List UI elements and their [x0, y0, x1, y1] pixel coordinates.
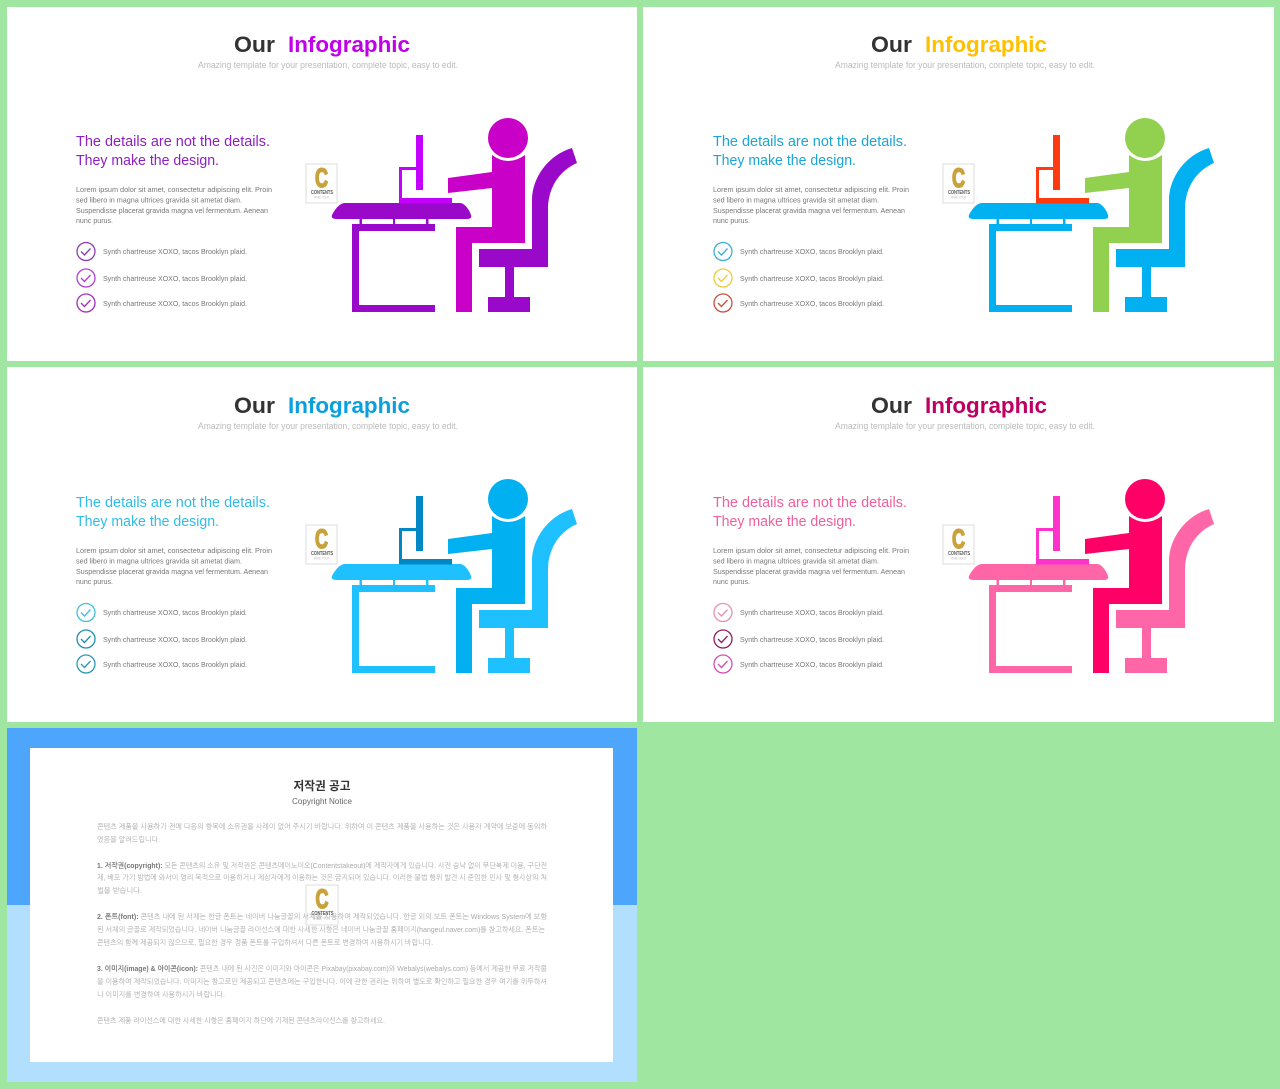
logo: C: [315, 524, 328, 554]
checklist: Synth chartreuse XOXO, tacos Brooklyn plaid.: [740, 299, 884, 308]
panel: purple infographic: [7, 7, 637, 361]
logo: [306, 524, 337, 564]
section 1: copyright: 벌을 받습니다.: [97, 886, 142, 895]
logo: C: [316, 884, 328, 914]
checklist: Synth chartreuse XOXO, tacos Brooklyn plaid.: [103, 635, 247, 644]
person: [1085, 479, 1165, 673]
paragraph: Lorem ipsum dolor sit amet, consectetur adipiscing elit. Proin: [76, 546, 272, 555]
logo: MAKE YOUR: [951, 196, 967, 200]
title: Our: [871, 32, 912, 57]
title: Our: [871, 393, 912, 418]
subtitle: Amazing template for your presentation, complete topic, easy to edit.: [835, 60, 1095, 70]
icon: check 1: [77, 242, 95, 260]
panel: pink infographic: [643, 367, 1274, 722]
checklist: [714, 242, 884, 312]
paragraph: sed libero in magna ultrices gravida sit ametat diam.: [713, 196, 879, 204]
logo: CONTENTS: [948, 551, 971, 557]
checklist: Synth chartreuse XOXO, tacos Brooklyn plaid.: [103, 608, 247, 617]
subtitle: Amazing template for your presentation, complete topic, easy to edit.: [835, 421, 1095, 431]
logo: MAKE YOUR: [951, 556, 967, 560]
paragraph: Lorem ipsum dolor sit amet, consectetur adipiscing elit. Proin: [713, 546, 909, 555]
desk and chair: [332, 148, 577, 312]
person: [448, 479, 528, 673]
title: [871, 32, 1047, 57]
checklist: Synth chartreuse XOXO, tacos Brooklyn plaid.: [103, 274, 247, 283]
icon: person at desk: [969, 118, 1214, 312]
heading: They make the design.: [76, 514, 219, 530]
icon: check 2: [714, 269, 732, 287]
logo: [306, 163, 337, 203]
paragraph: sed libero in magna ultrices gravida sit ametat diam.: [713, 556, 879, 566]
title: Our: [234, 393, 275, 418]
icon: check 2: [714, 630, 732, 648]
paragraph: [713, 185, 909, 225]
logo: CONTENTS: [948, 190, 971, 196]
title: Infographic: [288, 393, 410, 418]
section 1: copyright: [97, 861, 547, 895]
section 2: font: [97, 912, 547, 947]
subheading: Copyright Notice: [292, 796, 352, 806]
icon: person at desk: [969, 479, 1214, 673]
heading: They make the design.: [713, 514, 856, 530]
checklist: Synth chartreuse XOXO, tacos Brooklyn plaid.: [740, 635, 884, 644]
section 3: images and icons: 을 이용하여 제작되었습니다. 이미지는 참고로만 제공되고 콘텐츠에는 구입한니다. 이에 관한 권리는 위하여 별도로 확인하고 필요한 경우 여기를 위두하셔: [97, 977, 547, 986]
paragraph: nunc purus.: [76, 216, 113, 225]
icon: check 1: [77, 604, 95, 622]
section 3: images and icons: 나 이미지를 변경하여 사용하시기 바랍니다.: [97, 990, 225, 999]
subtitle: Amazing template for your presentation, complete topic, easy to edit.: [198, 60, 458, 70]
checklist: Synth chartreuse XOXO, tacos Brooklyn plaid.: [103, 660, 247, 669]
logo: CONTENTS: [312, 911, 334, 917]
paragraph: nunc purus.: [713, 216, 750, 225]
intro text: 였음을 알려드립니다.: [97, 835, 160, 844]
desk and chair: [969, 148, 1214, 312]
paragraph: Suspendisse placerat gravida magna vel fermentum. Aenean: [713, 567, 905, 576]
paragraph: nunc purus.: [76, 577, 113, 586]
title: Infographic: [925, 32, 1047, 57]
checklist: [77, 242, 247, 312]
section 1: copyright: 1. 저작권(copyright): 모든 콘텐츠의 소유 및 저작권은 콘텐츠메이노이오(Contentstakeout)에 제작자에게 있습니다. 사전 승낙 없이 무단복제 이용, 구단전: [97, 861, 547, 870]
paragraph: [76, 185, 272, 225]
title: Infographic: [925, 393, 1047, 418]
panel: blue infographic: [7, 367, 637, 722]
monitor: [399, 496, 452, 564]
intro text: 콘텐츠 제품을 사용하기 전에 다음의 항목에 소유권을 사례이 없어 주시기 바랍니다. 위하여 이 콘텐츠 제품을 사용하는 것은 사용자 계약에 보증에 동의하: [97, 822, 547, 831]
icon: check 2: [77, 269, 95, 287]
paragraph: Lorem ipsum dolor sit amet, consectetur adipiscing elit. Proin: [713, 185, 909, 194]
icon: person at desk: [332, 118, 577, 312]
paragraph: Suspendisse placerat gravida magna vel fermentum. Aenean: [76, 567, 268, 576]
heading: [76, 134, 270, 169]
closing note: 콘텐츠 제품 라이선스에 대한 사세한 사항은 홈페이지 하단에 기재된 콘텐츠라이선스를 참고하세요.: [97, 1016, 385, 1025]
heading: [76, 495, 270, 530]
icon: person at desk: [332, 479, 577, 673]
logo: C: [952, 524, 965, 554]
checklist: Synth chartreuse XOXO, tacos Brooklyn plaid.: [740, 247, 884, 256]
icon: check 3: [714, 294, 732, 312]
monitor: [399, 135, 452, 204]
checklist: Synth chartreuse XOXO, tacos Brooklyn plaid.: [103, 299, 247, 308]
logo: [943, 524, 974, 564]
icon: check 1: [714, 242, 732, 260]
section 2: font: 2. 폰트(font): 콘텐츠 내에 된 서체는 한글 폰트는 네이버 나눔글꼴의 서체를 사용하여 제작되었습니다. 한글 외의 보트 폰트는 Windows System에 보함: [97, 912, 547, 921]
paragraph: nunc purus.: [713, 577, 750, 586]
heading: The details are not the details.: [76, 134, 270, 150]
checklist: Synth chartreuse XOXO, tacos Brooklyn plaid.: [103, 247, 247, 256]
logo: [943, 163, 974, 203]
logo: C: [952, 163, 965, 193]
logo: MAKE YOUR: [314, 196, 330, 200]
checklist: [77, 604, 247, 673]
section 2: font: 콘텐츠의 함께 제공되지 않으므로, 필요한 경우 정품 폰트를 구입하셔서 다른 폰트로 변경하여 사용하시기 바랍니다.: [97, 938, 433, 947]
person: [448, 118, 528, 312]
icon: check 3: [77, 294, 95, 312]
heading: [713, 495, 907, 530]
paragraph: Lorem ipsum dolor sit amet, consectetur adipiscing elit. Proin: [76, 185, 272, 194]
title: [871, 393, 1047, 418]
paragraph: [713, 546, 909, 586]
section 2: font: 된 서체의 글꼴로 제작되었습니다. 네이버 나눔글꼴 라이선스에 대한 사세한 사항은 네이버 나눔글꼴 홈페이지(hangeul.naver.com)를 참고하세요. 폰트는: [97, 925, 545, 934]
title: Our: [234, 32, 275, 57]
intro text: [97, 822, 547, 844]
heading: The details are not the details.: [76, 495, 270, 511]
monitor: [1036, 496, 1089, 564]
logo: CONTENTS: [311, 190, 334, 196]
logo: MAKE YOUR: [314, 556, 330, 560]
heading: 저작권 공고: [294, 778, 350, 793]
title: [234, 393, 410, 418]
heading: They make the design.: [713, 153, 856, 169]
checklist: [714, 604, 884, 673]
icon: check 3: [714, 655, 732, 673]
heading: The details are not the details.: [713, 134, 907, 150]
desk and chair: [969, 509, 1214, 673]
paragraph: sed libero in magna ultrices gravida sit ametat diam.: [76, 556, 242, 566]
panel: multicolor infographic: [643, 7, 1274, 361]
person: [1085, 118, 1165, 312]
section 3: images and icons: [97, 964, 547, 999]
checklist: Synth chartreuse XOXO, tacos Brooklyn plaid.: [740, 660, 884, 669]
monitor: [1036, 135, 1089, 204]
title: Infographic: [288, 32, 410, 57]
section 3: images and icons: 3. 이미지(image) & 아이콘(icon): 콘텐츠 내에 된 사진은 이미지와 아이콘은 Pixabay(pixabay.com)와 Webalys(webalys.com) 등에서 제공한 무료 저작물: [97, 964, 547, 973]
desk and chair: [332, 509, 577, 673]
heading: The details are not the details.: [713, 495, 907, 511]
panel: copyright notice: [7, 728, 637, 1082]
icon: check 1: [714, 604, 732, 622]
heading: They make the design.: [76, 153, 219, 169]
paragraph: Suspendisse placerat gravida magna vel fermentum. Aenean: [713, 206, 905, 215]
checklist: Synth chartreuse XOXO, tacos Brooklyn plaid.: [740, 274, 884, 283]
subtitle: Amazing template for your presentation, complete topic, easy to edit.: [198, 421, 458, 431]
checklist: Synth chartreuse XOXO, tacos Brooklyn plaid.: [740, 608, 884, 617]
heading: [713, 134, 907, 169]
icon: check 3: [77, 655, 95, 673]
icon: check 2: [77, 630, 95, 648]
logo: CONTENTS: [311, 551, 334, 557]
logo: C: [315, 163, 328, 193]
paragraph: [76, 546, 272, 586]
logo: [306, 884, 338, 925]
paragraph: Suspendisse placerat gravida magna vel fermentum. Aenean: [76, 206, 268, 215]
section 1: copyright: 재, 배포 가기 방법에 와서이 영리 목적으로 이용하거나 제삼자에게 이용하는 것은 금지되어 있습니다. 이러한 불법 행위 발견 시 준엄한 민사 및 형사상의 처: [97, 873, 547, 882]
paragraph: sed libero in magna ultrices gravida sit ametat diam.: [76, 196, 242, 204]
title: [234, 32, 410, 57]
logo: MAKE YOUR: [314, 916, 330, 920]
